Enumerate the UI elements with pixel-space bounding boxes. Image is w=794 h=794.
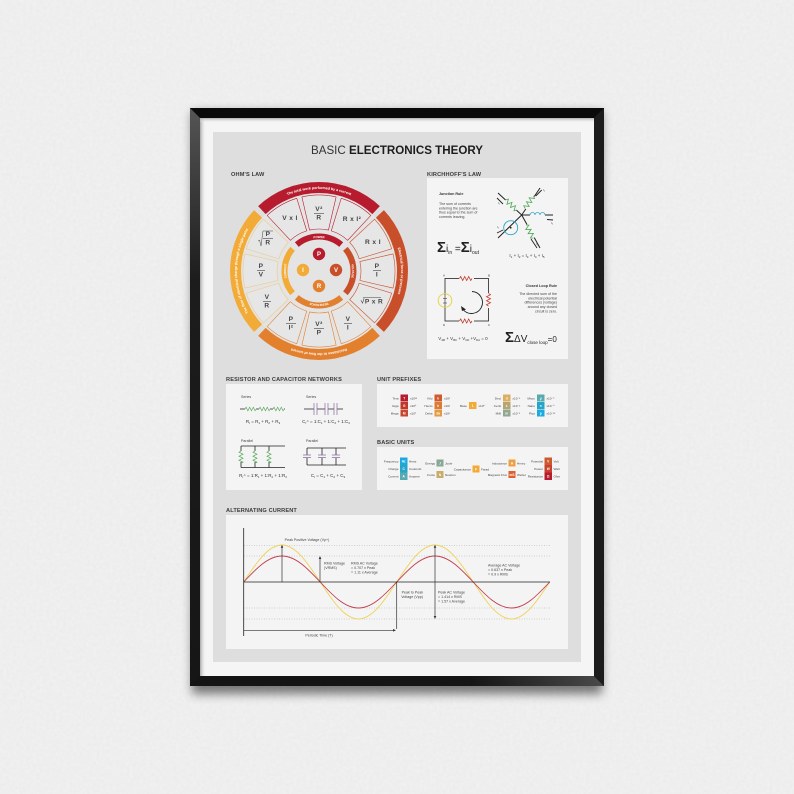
centre letters bbox=[297, 248, 342, 292]
AC annotations: = 0.707 x Peak bbox=[351, 566, 375, 570]
prefixes small: c bbox=[506, 404, 508, 408]
units column one: Ampere bbox=[409, 474, 420, 478]
AC annotations: Voltage (Vpp) bbox=[401, 595, 423, 599]
junction diagram bbox=[497, 188, 554, 248]
prefixes small: x10⁻² bbox=[512, 404, 520, 408]
current labels: I₄ bbox=[536, 242, 539, 246]
prefixes large: x10¹ bbox=[444, 411, 450, 415]
loop formula: close loop bbox=[527, 340, 548, 345]
parallel resistors: + 1:R bbox=[259, 473, 272, 478]
inner ring captions: VOLTAGE bbox=[351, 264, 354, 278]
series resistors: Series bbox=[241, 395, 251, 399]
units column two: Newton bbox=[445, 473, 456, 477]
prefixes large: Giga bbox=[392, 404, 399, 408]
centre letters: R bbox=[317, 284, 322, 290]
parallel resistors: = 1:R bbox=[246, 473, 259, 478]
series capacitors: + 1:C bbox=[322, 419, 335, 424]
AC annotations: (VRMS) bbox=[324, 566, 337, 570]
centre letters: I bbox=[302, 268, 304, 274]
units column four: Ω bbox=[547, 474, 550, 478]
outer ring captions: The flow of electrical charge through a single point bbox=[234, 228, 248, 314]
loop equation: = 0 bbox=[480, 336, 488, 341]
prefixes large: T bbox=[403, 396, 405, 400]
series capacitors: C bbox=[302, 419, 305, 424]
junction formula: Σi bbox=[437, 239, 448, 256]
units column one bbox=[384, 458, 422, 480]
prefixes small: x10⁻³ bbox=[512, 411, 520, 415]
wheel formulas: V bbox=[259, 272, 264, 278]
parallel capacitors: + C bbox=[325, 473, 334, 478]
poster bbox=[213, 132, 581, 662]
AC annotations: = 1.11 x Average bbox=[351, 570, 378, 574]
wheel formulas: I² bbox=[289, 324, 294, 332]
junction resistors bbox=[523, 194, 536, 210]
junction formula: = bbox=[452, 244, 461, 255]
AC annotations: = 1.57 x Average bbox=[438, 600, 465, 604]
heading: Kirchhoff's law: KIRCHHOFF'S LAW bbox=[427, 172, 482, 178]
series capacitors: 3 bbox=[348, 421, 350, 425]
series capacitors: 1 bbox=[321, 421, 323, 425]
junction rule text: The sum of currents bbox=[439, 202, 471, 206]
junction equation: + I bbox=[537, 253, 543, 258]
units column three: Magnetic Flux bbox=[488, 473, 507, 477]
wheel formulas: V² bbox=[315, 321, 323, 328]
wheel formulas: R bbox=[265, 240, 271, 246]
wheel formulas: P bbox=[317, 330, 322, 336]
black picture frame bbox=[190, 108, 604, 686]
parallel resistors: 2 bbox=[272, 475, 274, 479]
prefixes large: Deka bbox=[425, 411, 433, 415]
series resistors: + R bbox=[270, 419, 279, 424]
parallel resistors: t bbox=[242, 475, 243, 479]
loop equation: +V bbox=[469, 336, 476, 341]
parallel resistors: 1 bbox=[258, 475, 260, 479]
series capacitors: t bbox=[305, 421, 306, 425]
parallel resistors: 3 bbox=[285, 475, 287, 479]
voltage quadrant bbox=[345, 214, 402, 328]
current quadrant bbox=[236, 214, 293, 328]
units column four: Potential bbox=[531, 460, 543, 464]
series resistors: 3 bbox=[278, 421, 280, 425]
loop equation: V bbox=[438, 336, 441, 341]
axes bbox=[244, 528, 550, 636]
prefixes small: Deci bbox=[495, 396, 501, 400]
parallel capacitors: = C bbox=[315, 473, 324, 478]
units column two: Joule bbox=[445, 461, 453, 465]
series resistors: 2 bbox=[268, 421, 270, 425]
current labels: I₂ bbox=[543, 188, 546, 192]
units column four: Volt bbox=[554, 460, 559, 464]
parallel capacitors: Parallel bbox=[306, 439, 318, 443]
wheel backing disc bbox=[241, 193, 397, 349]
prefixes small: x10⁻⁶ bbox=[546, 396, 555, 400]
series resistors: + R bbox=[260, 419, 269, 424]
prefixes small: Centi bbox=[494, 404, 501, 408]
prefix base: 1 bbox=[472, 404, 474, 408]
loop equation: CD bbox=[465, 338, 469, 342]
heading: alternating current: ALTERNATING CURRENT bbox=[226, 508, 297, 514]
units column three: Henry bbox=[517, 461, 526, 465]
loop formula: =0 bbox=[548, 335, 557, 344]
series resistors: 1 bbox=[258, 421, 260, 425]
current labels: I₅ bbox=[497, 225, 500, 229]
AC annotations: = 1.414 x RMS bbox=[438, 595, 462, 599]
AC annotations: Peak AC Voltage bbox=[438, 590, 465, 594]
junction equation: = I bbox=[520, 253, 527, 258]
units column two bbox=[425, 460, 456, 478]
junction equation: + I bbox=[512, 253, 519, 258]
units column one: Hz bbox=[402, 460, 406, 464]
prefix base bbox=[460, 402, 485, 409]
Ohm's law wheel bbox=[230, 182, 408, 360]
series capacitors: Series bbox=[306, 395, 316, 399]
closed loop rule text: differences (voltage) bbox=[524, 301, 557, 305]
centre letters: V bbox=[334, 268, 338, 274]
wheel formulas: V² bbox=[315, 206, 323, 213]
prefixes large: x10⁹ bbox=[410, 404, 417, 408]
outer ring captions: The total work performed by a current bbox=[286, 186, 352, 196]
wheel formulas: V bbox=[265, 294, 270, 301]
prefixes large: k bbox=[437, 396, 439, 400]
units column one: Current bbox=[388, 474, 399, 478]
parallel resistors bbox=[238, 439, 287, 479]
heading: basic units: BASIC UNITS bbox=[377, 440, 415, 446]
loop equation: AB bbox=[441, 338, 445, 342]
junction formula: out bbox=[472, 250, 480, 256]
junction source circle bbox=[504, 221, 518, 235]
units column four: V bbox=[547, 460, 550, 464]
AC annotations: = 0.9 x RMS bbox=[488, 572, 508, 576]
units column four: Ohm bbox=[554, 474, 561, 478]
panel: alternating current bbox=[226, 515, 568, 649]
prefixes small: Micro bbox=[527, 396, 535, 400]
parallel capacitors: 3 bbox=[343, 475, 345, 479]
prefixes small: μ bbox=[540, 396, 542, 400]
resistance quadrant bbox=[262, 297, 376, 354]
series resistors: t bbox=[249, 421, 250, 425]
AC annotations: Peak Positive Voltage (Vp+) bbox=[285, 538, 329, 542]
wheel formulas bbox=[257, 206, 383, 336]
junction rule text bbox=[439, 192, 478, 219]
wheel formulas: I bbox=[347, 324, 349, 332]
series resistors: R bbox=[246, 419, 249, 424]
junction rule text: entering the junction are bbox=[439, 206, 478, 210]
prefixes small: Milli bbox=[496, 411, 501, 415]
units column four: Watt bbox=[554, 467, 560, 471]
parallel capacitors: 1 bbox=[323, 475, 325, 479]
outer ring captions: Electrical force or pressure bbox=[398, 248, 404, 294]
closed loop rule text: Closed Loop Rule bbox=[526, 284, 557, 288]
prefixes small: p bbox=[540, 411, 542, 415]
prefixes large: M bbox=[403, 411, 406, 415]
series resistors: = R bbox=[250, 419, 259, 424]
panel: resistor and capacitor networks bbox=[226, 384, 362, 490]
loop equation: BC bbox=[453, 338, 457, 342]
series capacitors: 2 bbox=[335, 421, 337, 425]
prefixes large: x10⁶ bbox=[410, 411, 417, 415]
parallel capacitors: 2 bbox=[333, 475, 335, 479]
yellow sine wave bbox=[244, 545, 550, 619]
junction equation: 5 bbox=[543, 255, 545, 259]
prefixes large: G bbox=[403, 404, 406, 408]
current labels: I₁ bbox=[498, 201, 500, 205]
units column one: Hertz bbox=[409, 460, 417, 464]
units column three: Inductance bbox=[492, 461, 507, 465]
junction equation: 1 bbox=[511, 255, 513, 259]
parallel capacitors bbox=[303, 439, 346, 479]
junction rule text: thus equal to the sum of bbox=[439, 211, 477, 215]
units centre: Capacitance bbox=[454, 467, 471, 471]
prefixes small bbox=[494, 394, 555, 416]
prefixes large: x10³ bbox=[444, 396, 450, 400]
prefixes large: Mega bbox=[391, 411, 399, 415]
units column one: A bbox=[403, 474, 406, 478]
junction rule text: currents leaving. bbox=[439, 215, 465, 219]
heading: resistor and capacitor networks: RESISTOR AND CAPACITOR NETWORKS bbox=[226, 377, 342, 383]
units column four: Power bbox=[534, 467, 543, 471]
units column three: Weber bbox=[517, 473, 526, 477]
inner ring captions: RESISTANCE bbox=[310, 302, 328, 306]
loop equation: DA bbox=[476, 338, 480, 342]
prefixes small: n bbox=[540, 404, 542, 408]
units column four: W bbox=[547, 467, 550, 471]
series resistors bbox=[240, 395, 285, 425]
prefixes large bbox=[391, 394, 450, 416]
centre letters: P bbox=[317, 252, 321, 258]
AC annotations: RMS Voltage bbox=[324, 562, 345, 566]
units column two: Energy bbox=[425, 461, 435, 465]
closed loop circuit bbox=[438, 274, 491, 327]
AC annotations: RMS AC Voltage bbox=[351, 562, 378, 566]
parallel resistors: R bbox=[239, 473, 242, 478]
series capacitors: = 1:C bbox=[309, 419, 322, 424]
units column three bbox=[488, 460, 526, 478]
parallel capacitors: C bbox=[311, 473, 314, 478]
closed loop circuit: D bbox=[443, 323, 446, 327]
junction formula: Σi bbox=[461, 239, 472, 256]
closed loop rule text bbox=[519, 284, 557, 313]
current labels: I₃ bbox=[551, 221, 554, 225]
junction equation: + I bbox=[528, 253, 535, 258]
wheel formulas: P bbox=[259, 263, 264, 270]
AC annotations: Peak to Peak bbox=[402, 590, 423, 594]
prefixes large: Tera bbox=[392, 396, 399, 400]
closed loop circuit: B bbox=[488, 274, 490, 278]
AC annotations bbox=[285, 538, 520, 638]
units column two: Force bbox=[427, 473, 435, 477]
units column one: Frequency bbox=[384, 460, 399, 464]
outer ring captions: Resistance to the flow of current bbox=[291, 348, 347, 356]
closed loop rule text: circuit is zero. bbox=[535, 309, 557, 313]
junction current arrows bbox=[497, 190, 553, 248]
units column four bbox=[528, 458, 561, 480]
junction formula: in bbox=[448, 250, 452, 256]
prefixes large: h bbox=[437, 404, 439, 408]
junction inductor bbox=[530, 212, 545, 218]
prefixes small: Pico bbox=[529, 411, 535, 415]
prefix base: Base bbox=[460, 404, 467, 408]
current labels bbox=[497, 188, 554, 246]
prefixes small: d bbox=[506, 396, 508, 400]
AC annotations: Average AC Voltage bbox=[488, 564, 520, 568]
junction wires bbox=[498, 188, 553, 248]
wheel formulas: R bbox=[316, 214, 322, 222]
units column two: N bbox=[439, 473, 442, 477]
series capacitors: -1 bbox=[306, 419, 309, 423]
wheel formulas: R x I² bbox=[343, 216, 362, 223]
wheel formulas: P bbox=[375, 263, 380, 270]
closed loop rule text: electrical potential bbox=[528, 296, 557, 300]
wheel formulas: I bbox=[376, 272, 378, 278]
prefixes large: x10¹² bbox=[410, 396, 417, 400]
inner ring captions bbox=[284, 236, 354, 306]
prefix base: x10⁰ bbox=[478, 404, 485, 408]
junction equation: I bbox=[509, 253, 511, 258]
outer ring captions bbox=[234, 186, 404, 356]
title: BASIC ELECTRONICS THEORY bbox=[311, 145, 483, 157]
wheel formulas: P bbox=[266, 231, 271, 238]
units column three: mS bbox=[510, 473, 514, 477]
units column one: Coulomb bbox=[409, 467, 422, 471]
parallel capacitors: t bbox=[314, 475, 315, 479]
prefixes small: x10⁻¹² bbox=[546, 411, 555, 415]
units column one: Charge bbox=[388, 467, 399, 471]
prefixes small: Nano bbox=[528, 404, 535, 408]
wheel formulas: √P x R bbox=[361, 298, 383, 306]
junction rule text: Junction Rule bbox=[439, 192, 463, 196]
junction equation: 3 bbox=[527, 255, 529, 259]
heading: unit prefixes: UNIT PREFIXES bbox=[377, 377, 421, 383]
parallel resistors: Parallel bbox=[241, 439, 253, 443]
loop formula: ΣΔV bbox=[505, 329, 527, 346]
prefixes large: Hecto bbox=[424, 404, 433, 408]
units column four: Resistance bbox=[528, 474, 543, 478]
units centre bbox=[454, 466, 489, 472]
frame shadow bbox=[192, 112, 602, 694]
panel: Kirchhoff's law bbox=[427, 178, 568, 359]
wheel formulas: V bbox=[346, 316, 351, 323]
units column one: C bbox=[403, 467, 406, 471]
white mat bbox=[200, 118, 594, 676]
panel: unit prefixes bbox=[377, 384, 568, 427]
closed loop circuit: A bbox=[443, 274, 446, 278]
prefixes small: x10⁻¹ bbox=[512, 396, 520, 400]
series capacitors: + 1:C bbox=[336, 419, 349, 424]
prefixes large: Kilo bbox=[427, 396, 433, 400]
wheel formulas: P bbox=[289, 316, 294, 323]
red sine wave bbox=[244, 556, 550, 608]
prefixes large: da bbox=[436, 411, 440, 415]
units column two: J bbox=[439, 461, 441, 465]
wheel formulas: R x I bbox=[365, 239, 381, 246]
junction equation: 2 bbox=[519, 255, 521, 259]
dotted reference lines bbox=[244, 546, 550, 619]
prefixes small: x10⁻⁹ bbox=[546, 404, 555, 408]
panel: basic units bbox=[377, 447, 568, 490]
grey poster background bbox=[213, 132, 581, 662]
inner ring captions: CURRENT bbox=[284, 264, 287, 278]
prefixes small: m bbox=[505, 411, 508, 415]
junction equation: 4 bbox=[535, 255, 537, 259]
parallel capacitors: + C bbox=[335, 473, 344, 478]
units column three: H bbox=[511, 461, 514, 465]
units centre: Farad bbox=[481, 467, 489, 471]
closed loop rule text: around any closed bbox=[528, 305, 557, 309]
units centre: F bbox=[475, 467, 477, 471]
prefixes large: x10² bbox=[444, 404, 450, 408]
wheel formulas: R bbox=[264, 302, 270, 310]
AC annotations: = 0.637 x Peak bbox=[488, 568, 512, 572]
closed loop rule text: The directed sum of the bbox=[519, 292, 557, 296]
heading: Ohm's law: OHM'S LAW bbox=[231, 172, 265, 178]
parallel resistors: + 1:R bbox=[273, 473, 286, 478]
loop equation: + V bbox=[445, 336, 453, 341]
AC annotations: Periodic Time (T) bbox=[305, 634, 333, 638]
parallel resistors: -1 bbox=[243, 473, 246, 477]
inner ring captions: POWER bbox=[313, 236, 324, 238]
measure arrows bbox=[244, 545, 436, 632]
wheel formulas: V x I bbox=[282, 215, 298, 222]
loop equation: + V bbox=[457, 336, 465, 341]
closed loop circuit: C bbox=[488, 323, 491, 327]
power quadrant bbox=[262, 188, 376, 245]
series capacitors bbox=[302, 395, 350, 425]
